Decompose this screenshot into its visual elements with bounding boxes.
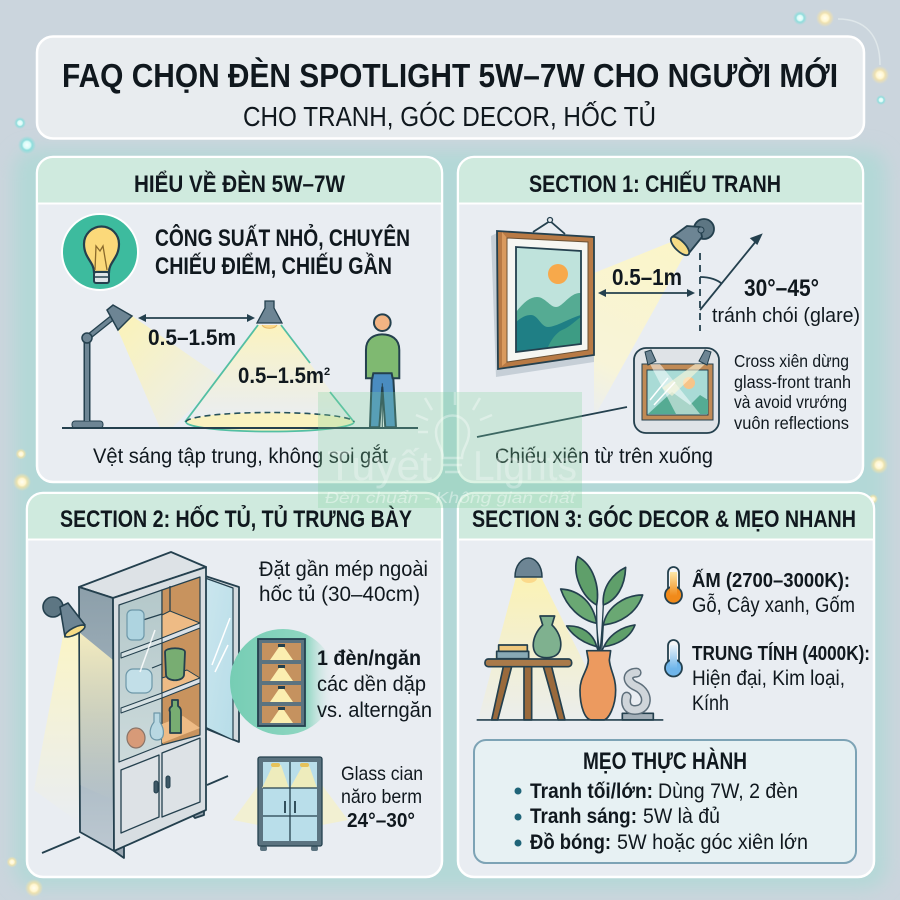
callout: tips: Tranh sáng: <box>530 804 637 828</box>
beam: cabinet spotlight <box>34 632 82 825</box>
text: one lamp per shelf: các dền dặp <box>317 672 426 696</box>
angle diagram <box>700 235 761 331</box>
inset note: Cross xiên dừng <box>734 351 849 371</box>
text: one lamp per shelf: 1 đèn/ngăn <box>317 646 421 670</box>
icon: ceiling lamp <box>257 301 282 328</box>
text: neutral: TRUNG TÍNH (4000K): <box>692 642 870 665</box>
cone of light <box>185 325 354 432</box>
callout: tips: Dùng 7W, 2 đèn <box>658 779 798 803</box>
text: warm: Gỗ, Cây xanh, Gốm <box>692 592 855 617</box>
title: FAQ CHỌN ĐÈN SPOTLIGHT 5W–7W CHO NGƯỜI MỚI <box>62 57 838 94</box>
text: one lamp per shelf: vs. alterngăn <box>317 698 432 722</box>
text: warm <box>692 569 855 617</box>
icon: neutral thermometer <box>665 640 682 676</box>
text: placement: Đặt gần mép ngoài <box>259 557 428 581</box>
beam: spotlight <box>594 242 685 425</box>
label: angle: tránh chói (glare) <box>712 305 860 327</box>
icon: warm thermometer <box>665 567 682 604</box>
text: warm: ẤM (2700–3000K): <box>692 569 850 592</box>
inset: glass cabinet <box>233 757 348 851</box>
icon: pendant lamp <box>515 558 542 583</box>
inset note: vuôn reflections <box>734 413 849 433</box>
text: glass cabinet: 24°–30° <box>347 809 415 832</box>
beam: desk lamp <box>118 316 222 428</box>
watermark: Tuyết <box>327 442 432 489</box>
title panel <box>37 36 864 138</box>
panel: chiếu tranh <box>458 157 863 482</box>
panel: hốc tủ <box>27 493 442 877</box>
dimension arrow <box>598 289 695 297</box>
label: distance: 0.5–1m <box>612 264 682 290</box>
heading: SECTION 1: CHIẾU TRANH <box>529 170 781 198</box>
inset note <box>734 351 851 433</box>
inset note: và avoid vrướng <box>734 392 847 412</box>
callout: tips: 5W là đủ <box>643 804 720 828</box>
text: neutral <box>692 642 870 715</box>
watermark: Đèn chuẩn - Không gian chất <box>325 489 576 507</box>
callout: tips: MẸO THỰC HÀNH <box>583 747 747 775</box>
floor line <box>62 427 418 429</box>
illustration: decor scene <box>477 557 663 720</box>
text: công suất: CHIẾU ĐIỂM, CHIẾU GẦN <box>155 252 392 280</box>
subtitle: CHO TRANH, GÓC DECOR, HỐC TỦ <box>243 100 656 132</box>
icon: desk lamp <box>72 305 132 428</box>
label: distance: 0.5–1.5m <box>148 325 236 350</box>
label: area: 0.5–1.5m <box>238 363 324 388</box>
beam: pendant lamp <box>478 577 585 720</box>
text: neutral: Hiện đại, Kim loại, <box>692 666 845 690</box>
callout: tips <box>474 740 856 863</box>
text: công suất: CÔNG SUẤT NHỎ, CHUYÊN <box>155 223 410 252</box>
text: glass cabinet: Glass cian <box>341 763 423 785</box>
floor lines <box>42 776 228 853</box>
callout: tips: 5W hoặc góc xiên lớn <box>617 830 808 854</box>
text: neutral: Kính <box>692 691 729 715</box>
label: angle: 30°–45° <box>744 275 819 302</box>
text: placement: hốc tủ (30–40cm) <box>259 582 420 606</box>
text: placement <box>259 557 428 606</box>
watermark: Lights <box>473 442 577 489</box>
panel: góc decor <box>458 493 874 877</box>
caption: Vệt sáng tập trung, không soi gắt <box>93 443 388 468</box>
text: one lamp per shelf <box>317 646 432 722</box>
leader line <box>477 407 627 437</box>
icon: light bulb <box>62 214 138 290</box>
icon: framed picture <box>491 218 594 377</box>
caption: Chiếu xiên từ trên xuống <box>495 444 713 468</box>
icon: person <box>366 314 399 427</box>
icon: wall spotlight <box>668 219 714 258</box>
heading: SECTION 2: HỐC TỦ, TỦ TRƯNG BÀY <box>60 504 412 533</box>
callout: tips: Đồ bóng: <box>530 830 611 854</box>
inset: one lamp per shelf <box>230 629 336 735</box>
dimension arrow <box>138 314 255 322</box>
label: area: 2 <box>324 366 330 378</box>
inset note: glass-front tranh <box>734 372 851 392</box>
panel: hiểu về đèn <box>37 157 442 482</box>
illustration: cabinet <box>79 552 239 858</box>
watermark <box>318 392 582 508</box>
inset: cross lighting <box>634 348 719 433</box>
label: angle <box>712 275 860 327</box>
callout: tips: Tranh tối/lớn: <box>530 779 653 803</box>
icon: wall spotlight <box>43 597 86 639</box>
text: công suất <box>155 223 410 280</box>
heading: HIỂU VỀ ĐÈN 5W–7W <box>134 170 345 198</box>
text: glass cabinet <box>341 763 423 832</box>
text: glass cabinet: năro berm <box>341 786 422 808</box>
